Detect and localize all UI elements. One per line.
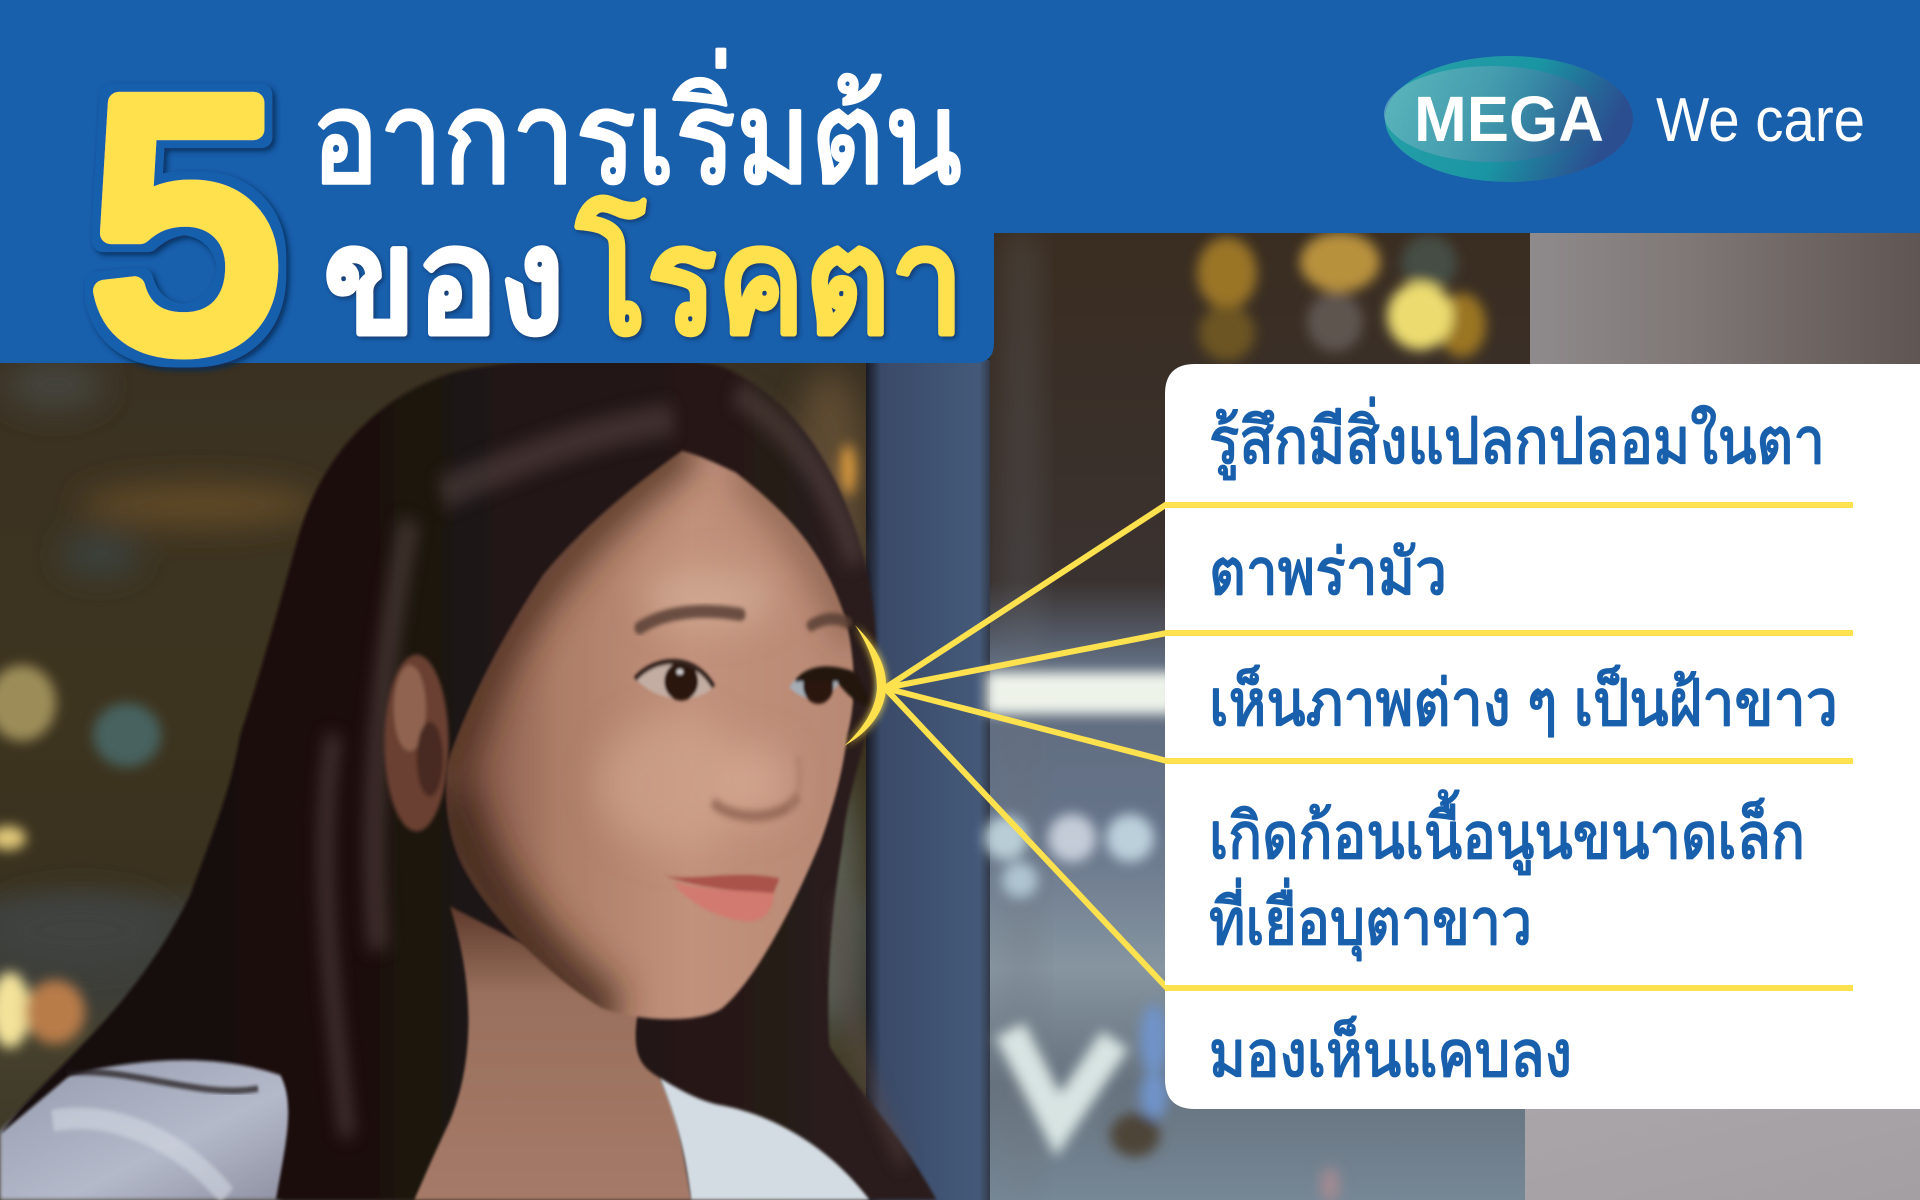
MEGA wordmark: MEGA xyxy=(1414,83,1604,155)
big number 5: 5 xyxy=(90,26,282,420)
title line 2 yellow: โรคตา xyxy=(576,197,964,365)
symptom 5: มองเห็นแคบลง xyxy=(1209,1017,1572,1090)
slate window column xyxy=(866,360,992,1200)
blurred window scene xyxy=(984,232,1920,1200)
wall bottom right xyxy=(1525,1105,1920,1200)
wall top right xyxy=(1530,233,1920,373)
nose shading xyxy=(716,756,800,816)
icon: glowing crescent at eye xyxy=(844,625,886,746)
symptom 3: เห็นภาพต่าง ๆ เป็นฝ้าขาว xyxy=(1209,666,1838,739)
city light bokeh xyxy=(984,232,1486,1200)
symptom 2: ตาพร่ามัว xyxy=(1209,536,1447,608)
logo oval xyxy=(1384,56,1633,182)
hair strand over shirt xyxy=(66,1072,258,1091)
symptom texts xyxy=(1209,397,1838,1090)
left bokeh backdrop xyxy=(0,360,880,1200)
header band and title panel xyxy=(0,0,1920,363)
hair xyxy=(0,358,937,1200)
vertical blurred stripe xyxy=(1008,233,1036,1200)
collar right xyxy=(660,1078,870,1200)
symptom 4 second line: ที่เยื่อบุตาขาว xyxy=(1209,878,1532,961)
yellow divider lines xyxy=(1165,502,1853,991)
symptom 4 first line: เกิดก้อนเนื้อนูนขนาดเล็ก xyxy=(1209,790,1805,875)
title line 1: อาการเริ่มต้น xyxy=(311,49,962,211)
right eye xyxy=(789,667,870,704)
left eye xyxy=(635,662,713,701)
ear xyxy=(384,655,449,831)
rays from eye to symptoms list xyxy=(885,504,1167,988)
white card xyxy=(1165,364,1920,1109)
shading xyxy=(448,440,852,1024)
eyebrows xyxy=(640,611,847,628)
face xyxy=(445,449,855,1022)
hair highlights xyxy=(325,392,905,1164)
MEGA We care logo xyxy=(1384,56,1865,182)
symptom 1: รู้สึกมีสิ่งแปลกปลอมในตา xyxy=(1209,397,1825,480)
panel: symptoms list xyxy=(1165,364,1920,1109)
shirt left xyxy=(0,1053,303,1200)
title xyxy=(90,26,964,420)
neck xyxy=(414,906,691,1200)
We care tagline: We care xyxy=(1656,86,1865,155)
woman portrait xyxy=(0,358,937,1200)
title line 2 white: ของ xyxy=(323,197,565,365)
lips xyxy=(664,875,779,921)
base skin xyxy=(445,450,855,1022)
